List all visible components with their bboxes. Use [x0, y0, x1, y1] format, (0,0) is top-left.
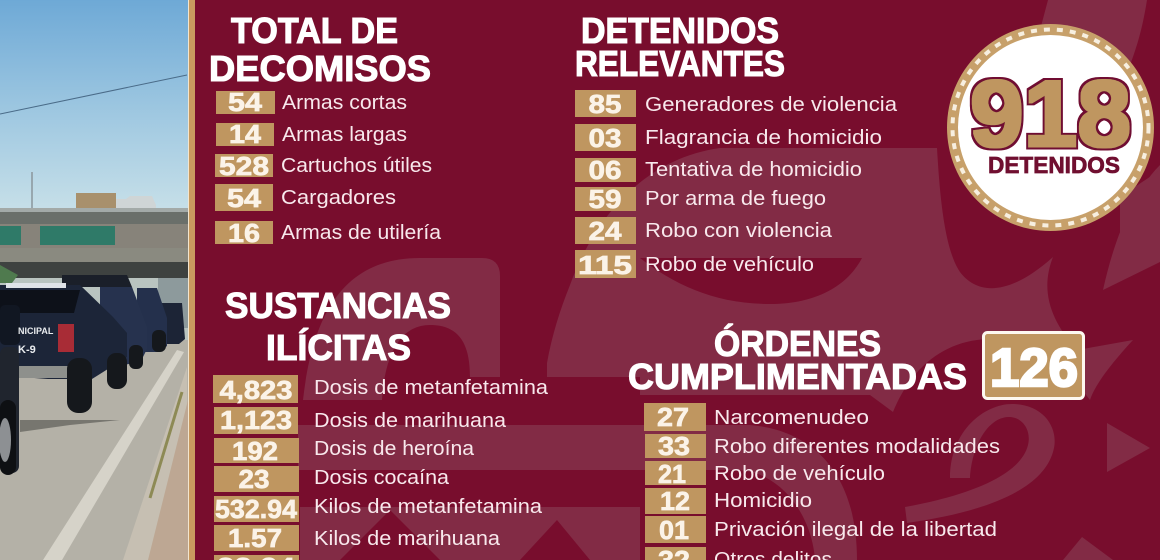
list: sustancias ilícitas: 1.57 — [228, 523, 282, 553]
list: detenidos relevantes: Por arma de fuego — [645, 188, 826, 210]
list: decomisos: Cartuchos útiles — [281, 155, 432, 177]
list: decomisos: Armas largas — [282, 124, 407, 146]
list: órdenes cumplimentadas: Homicidio — [714, 490, 812, 512]
list: detenidos relevantes: 115 — [578, 250, 632, 280]
badge: 918 detenidos: 918 — [970, 61, 1131, 166]
list: sustancias ilícitas: Dosis de marihuana — [314, 410, 507, 432]
list: sustancias ilícitas: Dosis cocaína — [314, 467, 450, 489]
list: órdenes cumplimentadas: 21 — [658, 459, 686, 489]
list: órdenes cumplimentadas: 12 — [660, 486, 690, 516]
list: órdenes cumplimentadas: Robo de vehículo — [714, 463, 885, 485]
heading: sustancias ilícitas — [225, 285, 451, 368]
list: decomisos: 54 — [228, 87, 263, 117]
panel: police convoy photo — [0, 0, 195, 560]
list: decomisos: 528 — [219, 151, 269, 181]
list: detenidos relevantes: Robo con violencia — [645, 220, 833, 242]
heading: órdenes cumplimentadas: ÓRDENES — [714, 322, 881, 364]
list: sustancias ilícitas: 23 — [238, 464, 270, 494]
heading: detenidos relevantes: RELEVANTES — [575, 43, 785, 84]
heading: sustancias ilícitas: SUSTANCIAS — [225, 285, 451, 326]
list: sustancias ilícitas: Kilos de marihuana — [314, 528, 501, 550]
heading: detenidos relevantes — [575, 10, 785, 84]
list: órdenes cumplimentadas: 27 — [657, 402, 689, 432]
list: detenidos relevantes: 03 — [588, 123, 622, 153]
list: órdenes cumplimentadas — [644, 402, 1000, 560]
list: decomisos: 16 — [228, 218, 260, 248]
list: decomisos: 54 — [227, 183, 262, 213]
list: detenidos relevantes — [575, 89, 898, 280]
list: sustancias ilícitas: 192 — [232, 436, 278, 466]
list: sustancias ilícitas: 1,123 — [220, 405, 292, 435]
heading: total de decomisos: DECOMISOS — [209, 48, 431, 89]
list: detenidos relevantes: Tentativa de homicidio — [645, 159, 862, 181]
list: detenidos relevantes: Robo de vehículo — [645, 254, 814, 276]
photo text: vehicle markings: K-9 — [18, 344, 36, 356]
callout: 126 órdenes: 126 — [990, 338, 1078, 398]
heading: sustancias ilícitas: ILÍCITAS — [266, 327, 411, 368]
list: detenidos relevantes: 24 — [588, 216, 622, 246]
list: decomisos: Armas cortas — [282, 92, 407, 114]
list: órdenes cumplimentadas: 33 — [658, 431, 690, 461]
list: órdenes cumplimentadas: Privación ilegal de la libertad — [714, 519, 997, 541]
heading: detenidos relevantes: DETENIDOS — [581, 10, 779, 51]
heading: total de decomisos: TOTAL DE — [231, 10, 398, 51]
list: órdenes cumplimentadas: Robo diferentes modalidades — [714, 436, 1000, 458]
list: decomisos: 14 — [229, 119, 262, 149]
list: detenidos relevantes: 06 — [588, 155, 622, 185]
badge: 918 detenidos — [947, 24, 1154, 231]
list: detenidos relevantes: 59 — [588, 184, 622, 214]
heading: total de decomisos — [209, 10, 431, 89]
badge: 918 detenidos: DETENIDOS — [988, 152, 1120, 178]
list: detenidos relevantes: 85 — [588, 89, 622, 119]
heading: órdenes cumplimentadas: CUMPLIMENTADAS — [628, 356, 967, 397]
list: sustancias ilícitas: Dosis de heroína — [314, 438, 475, 460]
heading: órdenes cumplimentadas — [628, 322, 967, 397]
list: órdenes cumplimentadas: 01 — [659, 515, 689, 545]
list: decomisos: Cargadores — [281, 187, 396, 209]
list: órdenes cumplimentadas: Narcomenudeo — [714, 407, 869, 429]
photo text: vehicle markings — [18, 326, 54, 356]
list: sustancias ilícitas: Kilos de metanfetamina — [314, 496, 543, 518]
photo text: vehicle markings: NICIPAL — [18, 326, 54, 336]
list: detenidos relevantes: Generadores de violencia — [645, 94, 898, 116]
list: sustancias ilícitas: Dosis de metanfetamina — [314, 377, 549, 399]
list: sustancias ilícitas: 4,823 — [220, 375, 292, 405]
list: decomisos: Armas de utilería — [281, 222, 442, 244]
list: detenidos relevantes: Flagrancia de homicidio — [645, 127, 882, 149]
list: sustancias ilícitas — [213, 375, 549, 560]
list: sustancias ilícitas: 532.94 — [215, 494, 298, 524]
list: decomisos — [215, 87, 442, 248]
